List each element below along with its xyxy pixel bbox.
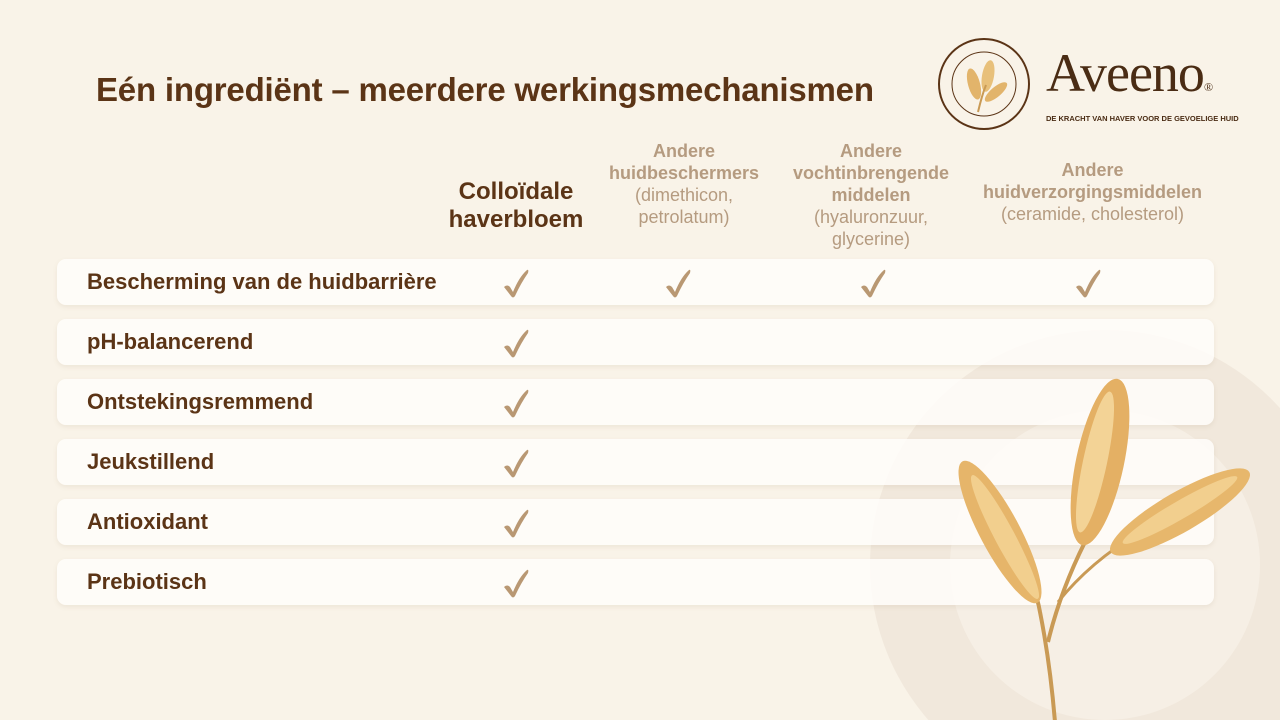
text: Andere huidbeschermers: [609, 141, 759, 183]
text: (dimethicon, petrolatum): [635, 185, 733, 227]
decorative circles: [870, 357, 1280, 720]
text: (ceramide, cholesterol): [1001, 204, 1184, 224]
text: pH-balancerend: [87, 329, 253, 354]
text: Andere huidverzorgingsmiddelen: [983, 160, 1202, 202]
text: (hyaluronzuur, glycerine): [814, 207, 928, 249]
column headers: Colloïdale haverbloem: [449, 178, 583, 233]
text: Prebiotisch: [87, 569, 207, 594]
text: Jeukstillend: [87, 449, 214, 474]
text: Ontstekingsremmend: [87, 389, 313, 414]
text: Andere vochtinbrengende middelen: [793, 141, 949, 205]
oat plant illustration: [958, 378, 1250, 720]
seal logo: [938, 38, 1030, 130]
brand logo: DE KRACHT VAN HAVER VOOR DE GEVOELIGE HUID: [1046, 114, 1239, 123]
brand logo: [1046, 43, 1239, 123]
text: Antioxidant: [87, 509, 208, 534]
brand logo: Aveeno®: [1046, 43, 1212, 103]
rows: [57, 259, 1214, 305]
title: Eén ingrediënt – meerdere werkingsmechanismen: [96, 71, 874, 108]
rows: Bescherming van de huidbarrière: [87, 269, 437, 294]
